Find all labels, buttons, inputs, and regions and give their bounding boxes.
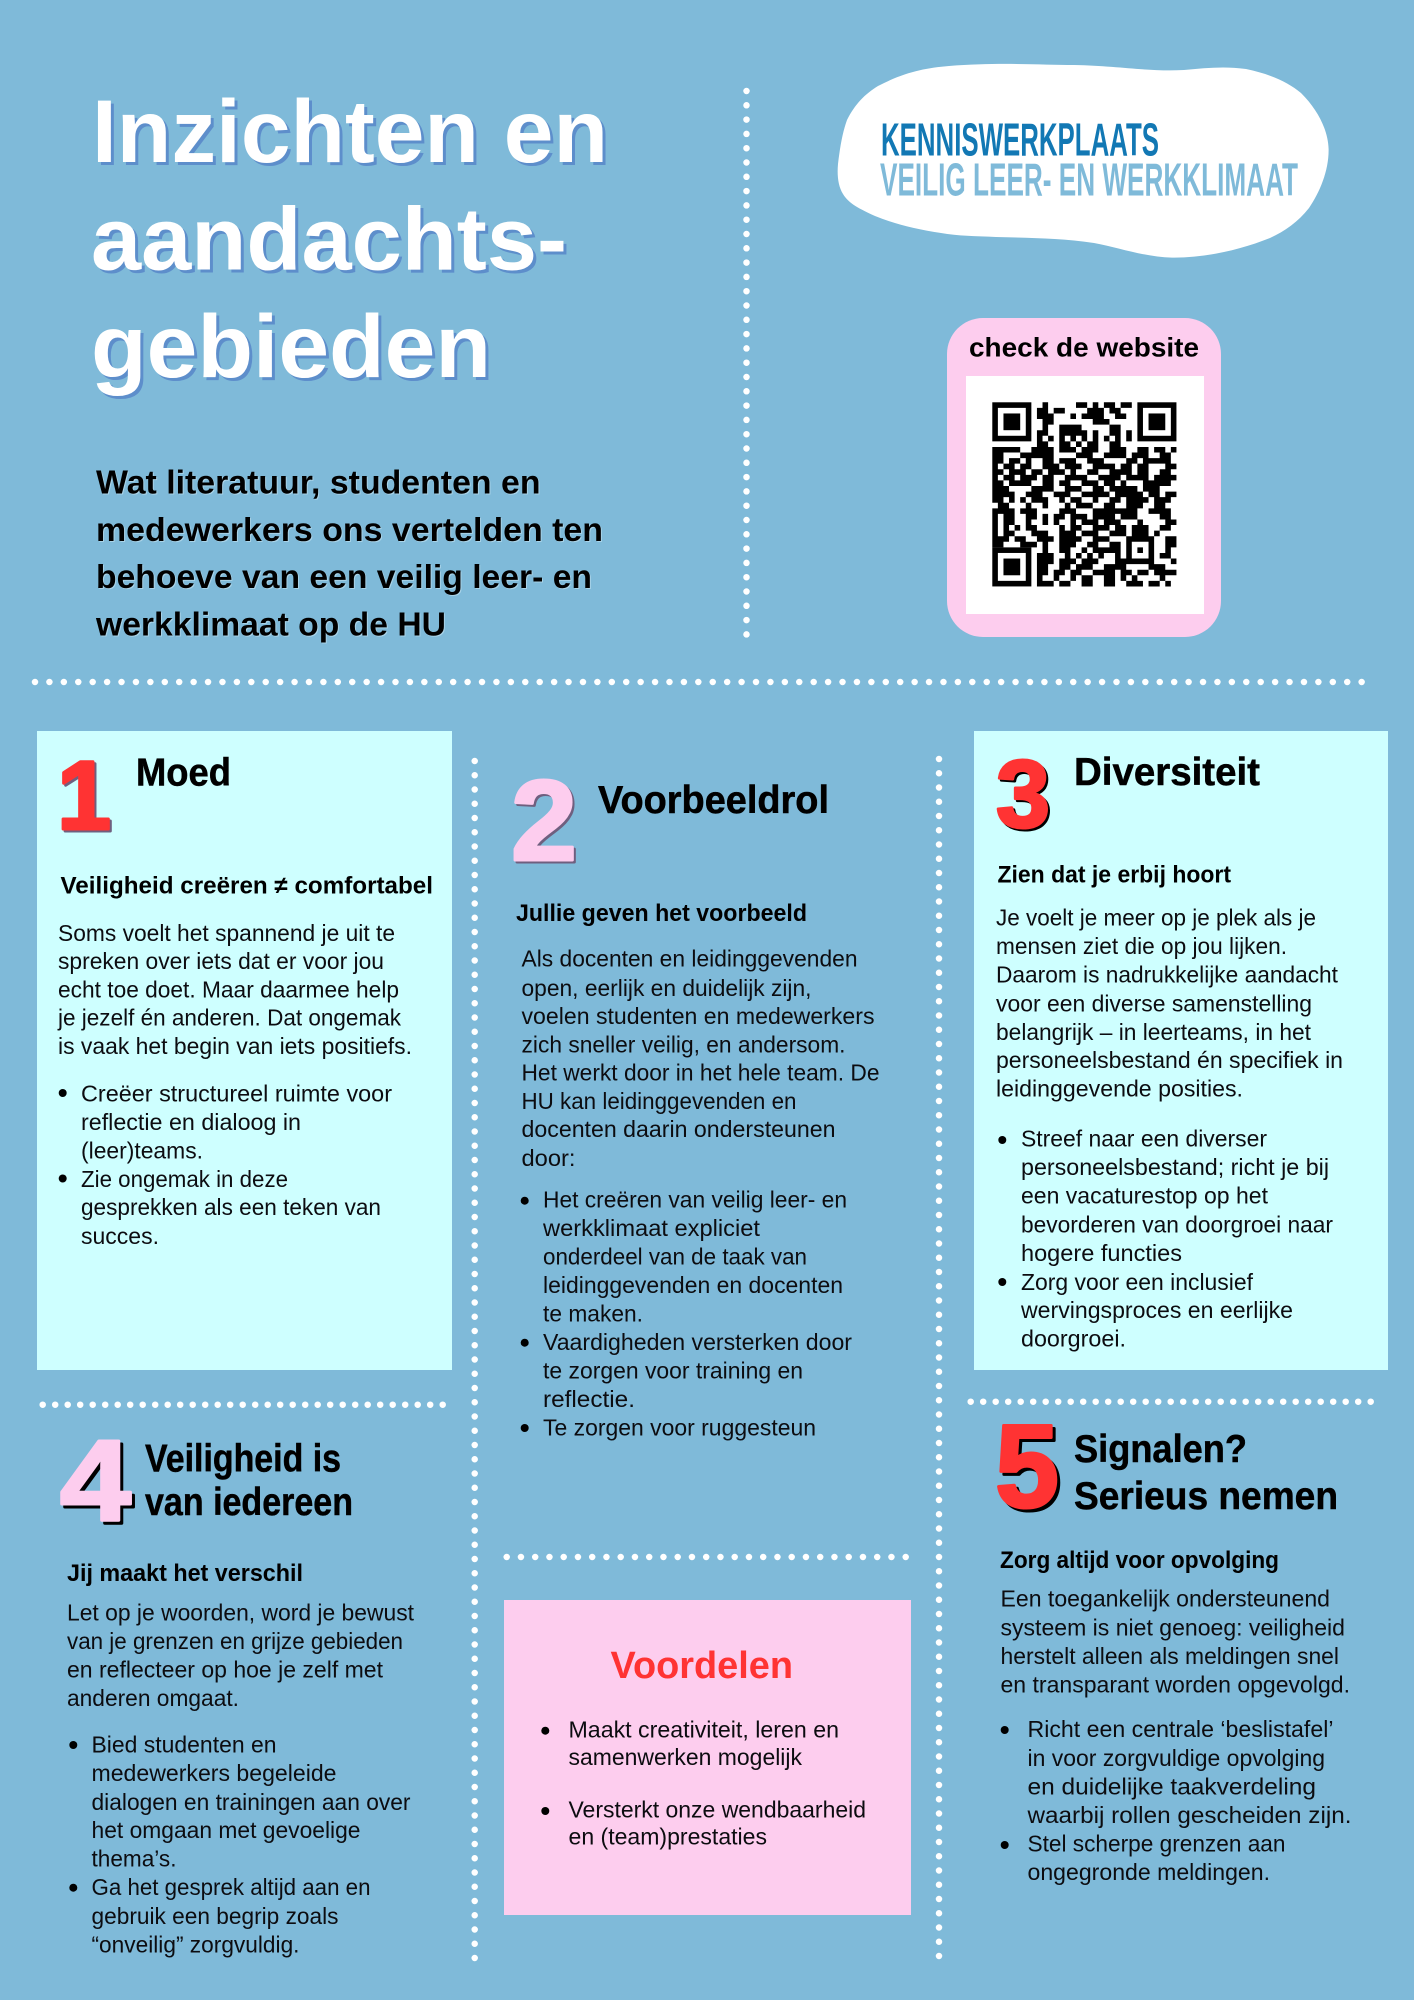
bullet list: en (team)prestaties: [568, 1823, 767, 1849]
body text: [522, 946, 880, 1171]
panel 4: Veiligheid is van iedereen: [60, 1417, 414, 1957]
bullet list: [541, 1717, 866, 1849]
bullet list: Bied studenten en: [92, 1732, 276, 1758]
number 4: 4: [60, 1417, 131, 1545]
body text: personeelsbestand én specifiek in: [996, 1047, 1343, 1073]
body text: systeem is niet genoeg: veiligheid: [1000, 1615, 1345, 1641]
bullet list: waarbij rollen gescheiden zijn.: [1026, 1802, 1352, 1828]
bullet list: Stel scherpe grenzen aan: [1028, 1830, 1286, 1856]
body text: [1000, 1586, 1350, 1698]
body text: HU kan leidinggevenden en: [522, 1088, 796, 1114]
bullet list: het omgaan met gevoelige: [92, 1817, 360, 1843]
QR card: check de website: check de website: [969, 332, 1199, 362]
bullet list: in voor zorgvuldige opvolging: [1028, 1745, 1325, 1771]
title: Inzichten en: [92, 81, 608, 181]
body text: Het werkt door in het hele team. De: [522, 1060, 880, 1086]
heading: van iedereen: [145, 1481, 353, 1524]
bullet list: ongegronde meldingen.: [1028, 1859, 1270, 1885]
bullet list: Versterkt onze wendbaarheid: [568, 1797, 866, 1823]
bullet list: Maakt creativiteit, leren en: [568, 1717, 839, 1743]
heading: [145, 1438, 353, 1524]
body text: van je grenzen en grijze gebieden: [67, 1628, 403, 1654]
subheading: Zorg altijd voor opvolging: [1000, 1547, 1279, 1574]
bullet list: personeelsbestand; richt je bij: [1021, 1154, 1329, 1180]
panel 1: Moed: [37, 731, 452, 1370]
body text: echt toe doet. Maar daarmee help: [58, 977, 399, 1003]
body text: is vaak het begin van iets positiefs.: [58, 1033, 412, 1059]
bullet list: te maken.: [543, 1301, 643, 1327]
body text: spreken over iets dat er voor jou: [58, 948, 384, 974]
bullet list: Streef naar een diverser: [1021, 1126, 1267, 1152]
body text: zich sneller veilig, en andersom.: [522, 1032, 846, 1058]
bullet list: leidinggevenden en docenten: [543, 1272, 843, 1298]
title: [91, 81, 608, 396]
panel 3: Diversiteit: [974, 731, 1388, 1370]
subheading: Jij maakt het verschil: [67, 1560, 303, 1587]
subtitle: werkklimaat op de HU: [95, 606, 446, 642]
subtitle: medewerkers ons vertelden ten: [96, 511, 603, 548]
bullet list: reflectie en dialoog in: [81, 1109, 301, 1135]
bullet list: (leer)teams.: [81, 1138, 203, 1164]
subheading: Zien dat je erbij hoort: [998, 862, 1231, 889]
heading: Moed: Moed: [136, 752, 231, 795]
bullet list: succes.: [81, 1223, 159, 1249]
bullet list: medewerkers begeleide: [92, 1760, 336, 1786]
bullet list: dialogen en trainingen aan over: [92, 1789, 411, 1815]
bullet list: [1001, 1716, 1352, 1885]
body text: Je voelt je meer op je plek als je: [996, 905, 1316, 931]
bullet list: te zorgen voor training en: [543, 1358, 803, 1384]
bullet list: reflectie.: [543, 1386, 635, 1412]
body text: je jezelf én anderen. Dat ongemak: [57, 1005, 401, 1031]
bullet list: een vacaturestop op het: [1021, 1182, 1268, 1208]
panel: Voordelen: [504, 1600, 911, 1915]
subtitle: behoeve van een veilig leer- en: [96, 558, 592, 595]
body text: Daarom is nadrukkelijke aandacht: [996, 962, 1338, 988]
body text: anderen omgaat.: [67, 1685, 239, 1711]
body text: voelen studenten en medewerkers: [522, 1003, 874, 1029]
body text: en reflecteer op hoe je zelf met: [67, 1656, 383, 1682]
bullet list: Creëer structureel ruimte voor: [81, 1080, 392, 1106]
number 5: 5: [995, 1401, 1059, 1533]
bullet list: doorgroei.: [1021, 1326, 1126, 1352]
bullet list: onderdeel van de taak van: [543, 1244, 807, 1270]
heading: Diversiteit: Diversiteit: [1074, 751, 1260, 794]
body text: Soms voelt het spannend je uit te: [58, 920, 395, 946]
QR card: check de website: [947, 318, 1221, 637]
bullet list: “onveilig” zorgvuldig.: [92, 1931, 300, 1957]
body text: door:: [522, 1145, 576, 1171]
heading: [1074, 1428, 1338, 1518]
bullet list: [69, 1732, 411, 1957]
body text: leidinggevende posities.: [996, 1076, 1243, 1102]
heading: Voordelen: Voordelen: [610, 1645, 793, 1687]
heading: Voorbeeldrol: Voorbeeldrol: [598, 779, 829, 822]
bullet list: samenwerken mogelijk: [568, 1744, 802, 1770]
bullet list: Zie ongemak in deze: [81, 1166, 288, 1192]
body text: open, eerlijk en duidelijk zijn,: [522, 975, 812, 1001]
bullet list: Het creëren van veilig leer- en: [543, 1187, 847, 1213]
body text: Als docenten en leidinggevenden: [522, 946, 858, 972]
title: gebieden: [91, 296, 491, 396]
subtitle: [95, 464, 603, 642]
title: aandachts-: [91, 188, 567, 288]
subheading: Veiligheid creëren ≠ comfortabel: [60, 873, 433, 900]
bullet list: [59, 1080, 392, 1249]
bullet list: [998, 1126, 1333, 1352]
bullet list: thema’s.: [92, 1846, 176, 1872]
bullet list: Ga het gesprek altijd aan en: [92, 1874, 370, 1900]
bullet list: Zorg voor een inclusief: [1021, 1269, 1253, 1295]
body text: Let op je woorden, word je bewust: [67, 1600, 414, 1626]
bullet list: Te zorgen voor ruggesteun: [543, 1415, 816, 1441]
number 3: 3: [996, 741, 1050, 848]
logo: kenniswerkplaats blob: [838, 64, 1329, 258]
body text: voor een diverse samenstelling: [996, 991, 1312, 1017]
bullet list: gebruik een begrip zoals: [92, 1903, 338, 1929]
panel 5: Signalen? Serieus nemen: [995, 1401, 1352, 1885]
bullet list: Richt een centrale ‘beslistafel’: [1028, 1716, 1334, 1742]
body text: en transparant worden opgevolgd.: [1000, 1672, 1350, 1698]
heading: Veiligheid is: [145, 1438, 341, 1481]
bullet list: en duidelijke taakverdeling: [1028, 1774, 1316, 1800]
bullet list: Vaardigheden versterken door: [543, 1329, 852, 1355]
bullet list: werkklimaat expliciet: [542, 1215, 760, 1241]
panel 2: Voorbeeldrol: [511, 758, 880, 1441]
body text: Een toegankelijk ondersteunend: [1000, 1586, 1330, 1612]
body text: [996, 905, 1343, 1102]
heading: Signalen?: [1074, 1428, 1247, 1471]
body text: docenten daarin ondersteunen: [522, 1116, 836, 1142]
bullet list: wervingsproces en eerlijke: [1020, 1297, 1293, 1323]
bullet list: bevorderen van doorgroei naar: [1021, 1212, 1333, 1238]
body text: herstelt alleen als meldingen snel: [1000, 1643, 1339, 1669]
body text: belangrijk – in leerteams, in het: [996, 1019, 1311, 1045]
heading: Serieus nemen: [1074, 1475, 1338, 1518]
number 1: 1: [57, 741, 111, 850]
body text: [67, 1600, 414, 1711]
logo: kenniswerkplaats blob: KENNISWERKPLAATS: [881, 114, 1159, 166]
number 2: 2: [511, 758, 577, 885]
bullet list: hogere functies: [1021, 1240, 1182, 1266]
QR code: [992, 405, 1176, 584]
bullet list: [521, 1187, 852, 1441]
subheading: Jullie geven het voorbeeld: [516, 900, 807, 927]
subtitle: Wat literatuur, studenten en: [96, 464, 540, 501]
body text: mensen ziet die op jou lijken.: [996, 933, 1287, 959]
body text: [57, 920, 412, 1059]
bullet list: gesprekken als een teken van: [81, 1194, 381, 1220]
